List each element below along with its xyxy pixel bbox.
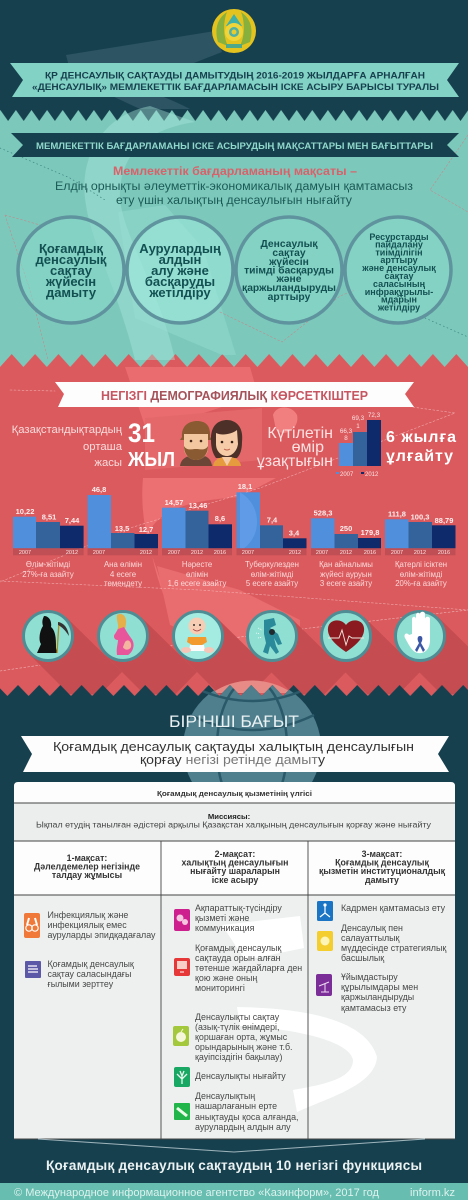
bar chart: tuberculosis mortality: 2007	[242, 550, 254, 556]
goal 3 item 2	[341, 923, 446, 963]
goal 2 item 5	[195, 1091, 298, 1132]
public health model table	[14, 782, 455, 1139]
public health model table: Ықпал етудің танылған әдістері арқылы Қазақстан халқының денсаулығын қорғау және нығайту	[36, 820, 431, 830]
goal circle 2	[127, 217, 233, 323]
caption: өлімін	[186, 570, 208, 579]
background: dark lower section	[0, 696, 468, 1186]
title text: «ДЕНСАУЛЫҚ» МЕМЛЕКЕТТІК БАҒДАРЛАМАСЫН ІСКЕ АСЫРУ БАРЫСЫ ТУРАЛЫ	[32, 82, 439, 92]
public health model table: халықтың денсаулығын	[182, 858, 288, 868]
mission row	[14, 803, 455, 841]
bar chart: infant mortality: 2007	[168, 550, 180, 556]
life expectancy bar chart: 8	[344, 435, 348, 442]
goal circle 2: алдын	[159, 252, 201, 267]
caption: 5 есеге азайту	[246, 579, 298, 588]
average age text: жасы	[94, 457, 122, 469]
goal circle 4: саласының	[373, 279, 426, 289]
bar chart: cancer mortality: 88,79	[435, 516, 453, 525]
goal circle 4: тиімділігін	[375, 248, 423, 258]
goal 2 item 1	[195, 903, 282, 933]
background: dark header	[0, 0, 468, 121]
bottom heading: 10 functions: Қоғамдық денсаулық сақтаудың 10 негізгі функциясы	[46, 1158, 422, 1173]
public health model table: талдау жұмысы	[52, 870, 122, 880]
goal circle 2: жетілдіру	[148, 285, 211, 300]
callout: 6 years growth: ұлғайту	[386, 448, 453, 465]
goal 2 item 2: қою және оның	[195, 973, 257, 983]
average age text	[12, 418, 175, 471]
goal circle 3: қаржыландыруды	[242, 283, 336, 294]
goal circle 1: жүйесін	[45, 274, 96, 289]
bar chart: infant mortality	[162, 498, 232, 588]
icon: pregnant woman	[98, 612, 148, 660]
caption	[319, 560, 373, 588]
goal 2 item 3: (азық-түлік өнімдері,	[195, 1022, 279, 1032]
bar chart: maternal mortality	[88, 485, 158, 588]
goal 1 item 2: Қоғамдық денсаулық	[48, 959, 134, 969]
goal 2 item 5: аурулардың алдын алу	[195, 1122, 291, 1132]
caption: Туберкулезден	[245, 560, 299, 569]
bar chart: circulatory disease: 2016	[364, 550, 376, 556]
caption: 20%-ға азайту	[395, 579, 447, 588]
goal 2 item 3: Денсаулықты сақтау	[195, 1012, 280, 1022]
public health model table: 1-мақсат:	[67, 853, 107, 863]
footer credit: © Международное информационное агентство «Казинформ», 2017 год	[14, 1187, 380, 1199]
goal 1 item 1: инфекциялық емес	[48, 920, 127, 930]
bar chart: infant mortality: 14,57	[165, 498, 183, 507]
goal 3 icon: purple scales	[316, 974, 332, 996]
bar chart: overall mortality: 8,51	[42, 512, 56, 522]
caption: Қатерлі ісіктен	[395, 560, 447, 569]
caption: Қан айналымы	[319, 560, 373, 569]
goal circle 4: мдарын	[381, 294, 417, 304]
bar chart: circulatory disease: 179,8	[361, 528, 379, 537]
globe cap over red section	[212, 680, 292, 693]
zigzag edge: red to dark	[0, 685, 468, 696]
bar chart: cancer mortality: 2012	[414, 550, 426, 556]
section title: first direction: БІРІНШІ БАҒЫТ	[169, 712, 299, 731]
goal 2 item 1: коммуникация	[195, 923, 255, 933]
public health model table: нығайту шараларын	[190, 866, 280, 876]
bar chart: infant mortality: 2012	[191, 550, 203, 556]
goal 2 item 1: Ақпараттық-түсіндіру	[195, 903, 282, 913]
goal 2 icon: green sprout	[174, 1067, 190, 1087]
icon: baby	[174, 612, 222, 660]
goal 3 icon: blue people	[317, 901, 333, 921]
caption: өлім-жітімді	[400, 570, 443, 579]
goal circle 4: жетілдіру	[377, 302, 420, 312]
caption	[104, 560, 142, 588]
public health model table: Қоғамдық денсаулық	[335, 858, 429, 868]
long shadows behind icon circles	[30, 617, 468, 694]
life expectancy bar chart: 72,3	[368, 412, 381, 419]
goal 2 item 2: Қоғамдық денсаулық	[195, 943, 281, 953]
bar chart: cancer mortality	[385, 510, 456, 588]
average age text: ЖЫЛ	[127, 449, 175, 471]
goal circle 3: және	[276, 274, 302, 285]
caption	[245, 560, 299, 588]
public health model table: 3-мақсат:	[362, 849, 402, 859]
icon: grim reaper	[24, 612, 72, 660]
bar chart: circulatory disease: 2007	[316, 550, 328, 556]
goal 2 item 2: сақтауда орын алған	[195, 953, 281, 963]
caption: Нәресте	[182, 560, 212, 569]
bar chart: cancer mortality: 100,3	[411, 512, 429, 522]
goal 2 icon: red monitor	[174, 958, 190, 976]
bar chart: maternal mortality: 13,5	[115, 524, 129, 533]
footer site: inform.kz	[410, 1187, 455, 1199]
caption: Ана өлімін	[104, 560, 142, 569]
icon: tuberculosis patient	[248, 612, 296, 660]
goal 3 item 1: Кадрмен қамтамасыз ету	[341, 903, 446, 913]
goal circle 4: пайдалану	[375, 240, 423, 250]
caption: 1,6 есеге азайту	[168, 579, 227, 588]
caption: 3 есеге азайту	[320, 579, 372, 588]
public health model table: Қоғамдық денсаулық қызметінің үлгісі	[157, 789, 312, 798]
life expectancy bar chart: 69,3	[352, 415, 365, 422]
goal circle 3: арттыру	[268, 292, 311, 303]
watermark logo	[66, 31, 300, 668]
goal 3 item 2: басшылық	[341, 953, 384, 963]
goal 1 item 2: сақтау саласындағы	[48, 969, 131, 979]
chart legend: 2007	[340, 472, 354, 478]
callout: 6 years growth: 6 жылға	[386, 429, 456, 446]
goal 3 icon: yellow phone	[317, 931, 333, 951]
goal 2 item 2: төтенше жағдайларға ден	[195, 963, 302, 973]
average age text: Қазақстандықтардың	[12, 424, 123, 436]
goal 1 item 2	[48, 959, 134, 989]
goals body	[14, 895, 455, 1139]
bar chart: circulatory disease: 528,3	[314, 508, 332, 518]
bar chart: circulatory disease	[311, 508, 381, 588]
zigzag edge: header to teal	[0, 110, 468, 121]
background: red section	[0, 367, 468, 697]
goal 1 icon: orange binoculars	[24, 913, 40, 938]
goal 3 item 3: қамтамасыз ету	[341, 1003, 407, 1013]
state emblem	[212, 9, 256, 53]
aim line 1: Елдің орнықты әлеуметтік-экономикалық дамуын қамтамасыз	[55, 181, 413, 193]
life expectancy label: Күтілетін	[267, 425, 333, 442]
ribbon line 1: Қоғамдық денсаулық сақтауды халықтың денсаулығын	[53, 740, 414, 754]
section ribbon: goals	[11, 133, 459, 157]
goal 2 item 5: Денсаулықтың	[195, 1091, 255, 1101]
life expectancy label: өмір	[292, 439, 324, 456]
caption: Өлім-жітімді	[26, 560, 70, 569]
goal circle 1: сақтау	[50, 263, 93, 278]
bar chart: tuberculosis mortality: 2012	[289, 550, 301, 556]
bar chart: overall mortality: 2012	[66, 550, 78, 556]
direction ribbon	[21, 736, 449, 772]
goal 3 item 3: қаржыландыруды	[341, 992, 414, 1002]
goal circle 1	[18, 217, 124, 323]
bar chart: maternal mortality: 46,8	[92, 485, 106, 494]
goal 2 item 3: орындарының және т.б.	[195, 1042, 292, 1052]
background: teal section	[0, 110, 468, 367]
bar chart: overall mortality: 7,44	[65, 516, 80, 525]
goal circle 3	[236, 217, 342, 323]
goal circle 4: сақтау	[384, 271, 414, 281]
title text: ҚР ДЕНСАУЛЫҚ САҚТАУДЫ ДАМЫТУДЫҢ 2016-2019 ЖЫЛДАРҒА АРНАЛҒАН	[45, 70, 425, 80]
bar chart: overall mortality: 10,22	[16, 507, 34, 516]
goal 2 icon: green apple	[173, 1026, 189, 1046]
goal 2 item 5: анықтауды қоса алғанда,	[195, 1112, 298, 1122]
caption: 27%-ға азайту	[22, 570, 74, 579]
goal circle 1: денсаулық	[36, 252, 107, 267]
icon: hand with ribbon	[396, 612, 444, 660]
life expectancy label: ұзақтығын	[257, 453, 333, 470]
goal 2 item 5: нашарлағанын ерте	[195, 1101, 277, 1111]
bar chart: circulatory disease: 2012	[340, 550, 352, 556]
life expectancy bar chart: 1	[356, 423, 360, 430]
bar chart: tuberculosis mortality: 18,1	[238, 482, 252, 491]
bar chart: infant mortality: 8,6	[215, 514, 225, 523]
goal 1 item 1: Инфекциялық және	[48, 910, 128, 920]
goal 2 item 3	[195, 1012, 292, 1062]
goal circle 1: Қоғамдық	[39, 241, 103, 256]
public health model table: Миссиясы:	[208, 812, 250, 821]
bar chart: maternal mortality: 12,7	[139, 525, 153, 534]
public health model table: Дәлелдемелер негізінде	[34, 862, 140, 872]
bar chart: cancer mortality: 111,8	[388, 510, 406, 518]
life expectancy bar chart	[336, 412, 381, 478]
goal circle 2: басқаруды	[145, 274, 215, 289]
title ribbon	[10, 63, 459, 97]
goal circle 4: Ресурстарды	[369, 232, 429, 242]
goal 2 item 3: қоршаған орта, жұмыс	[195, 1032, 288, 1042]
goal circle 1: дамыту	[46, 285, 97, 300]
goal 3 item 3: құрылымдары мен	[341, 982, 418, 992]
caption: өлім-жітімді	[251, 570, 294, 579]
goal 2 item 2	[195, 943, 302, 993]
bar chart: cancer mortality: 2007	[391, 550, 403, 556]
goal circle 3: сақтау	[272, 248, 306, 259]
bracket arrow under table	[38, 1139, 425, 1152]
goal circle 4: арттыру	[380, 255, 418, 265]
goal circle 4: инфрақұрылы-	[365, 287, 433, 297]
icon: heart with pulse	[322, 612, 370, 660]
caption: 4 есеге	[110, 570, 136, 579]
caption	[168, 560, 227, 588]
bar chart: infant mortality: 2016	[214, 550, 226, 556]
goal circle 3: тиімді басқаруды	[244, 264, 334, 276]
life expectancy label	[257, 425, 333, 470]
bar chart: infant mortality: 13,46	[189, 501, 207, 510]
goal 2 item 3: қауіпсіздігін бақылау)	[195, 1052, 282, 1062]
caption: жүйесі ауруын	[320, 570, 372, 579]
globe logo	[184, 685, 320, 782]
public health model table: 2-мақсат:	[215, 849, 255, 859]
goal 1 item 2: ғылыми зерттеу	[48, 979, 114, 989]
aim line 2: ету үшін халықтың денсаулығын нығайту	[116, 195, 352, 207]
goals header row	[14, 841, 455, 895]
bar chart: circulatory disease: 250	[340, 524, 352, 533]
bar chart: tuberculosis mortality: 3,4	[289, 528, 300, 538]
goal 3 item 2: салауаттылық	[341, 933, 400, 943]
bar chart: overall mortality	[13, 507, 84, 579]
public health model table: қызметін институционалдық	[319, 866, 446, 876]
aim heading: Мемлекеттік бағдарламаның мақсаты –	[113, 166, 358, 178]
demographic heading text: НЕГІЗГІ ДЕМОГРАФИЯЛЫҚ КӨРСЕТКІШТЕР	[101, 389, 368, 403]
bar chart: maternal mortality: 2012	[140, 550, 152, 556]
goal 3 item 3	[341, 972, 418, 1013]
bar chart: tuberculosis mortality: 7,4	[267, 516, 278, 524]
goal 2 icon: green bandage	[174, 1103, 190, 1120]
table title row	[14, 782, 455, 803]
goal 2 item 2: мониторингі	[195, 983, 245, 993]
goal 1 item 1: ауруларды эпидқадағалау	[48, 930, 156, 940]
dotted decorative lines	[0, 135, 468, 671]
ribbon line 2: қорғау негізі ретінде дамыт у	[140, 753, 326, 767]
goal circle 4	[345, 217, 451, 323]
goal 2 item 4: Денсаулықты нығайту	[195, 1071, 286, 1081]
goal 1 item 1	[48, 910, 156, 940]
white watermark swoosh	[222, 916, 377, 1112]
caption: төмендету	[104, 579, 142, 588]
bar chart: overall mortality: 2007	[19, 550, 31, 556]
goal 3 item 2: Денсаулық пен	[341, 923, 403, 933]
goal circle 2: Аурулардың	[139, 241, 221, 256]
value: 31 years: 31	[128, 418, 155, 448]
bar chart: tuberculosis mortality	[236, 482, 306, 588]
public health model table: іске асыру	[212, 875, 258, 885]
demographic heading ribbon	[55, 382, 414, 407]
goal circle 3: жүйесін	[268, 257, 309, 268]
goal 2 item 1: қызметі және	[195, 913, 249, 923]
goal 3 item 2: мүддесінде стратегиялық	[341, 943, 446, 953]
goal circle 3: Денсаулық	[260, 239, 318, 250]
goal 1 icon: purple books	[25, 961, 41, 978]
bar chart: maternal mortality: 2007	[93, 550, 105, 556]
goal circle 4: және денсаулық	[361, 263, 436, 273]
public health model table: дамыту	[365, 875, 399, 885]
caption	[395, 560, 447, 588]
callout: 6 years growth	[386, 429, 456, 465]
average age text: орташа	[83, 441, 123, 453]
icon: man and woman faces	[180, 420, 242, 466]
life expectancy bar chart: 66,3	[340, 428, 353, 435]
goal circle 2: алу және	[151, 263, 209, 278]
goal 3 item 3: Ұйымдастыру	[341, 972, 398, 982]
chart legend: 2012	[365, 472, 379, 478]
caption	[22, 560, 74, 579]
bar chart: cancer mortality: 2016	[438, 550, 450, 556]
programme aim text	[55, 166, 413, 207]
chart legend	[336, 472, 379, 478]
section ribbon text: МЕМЛЕКЕТТІК БАҒДАРЛАМАНЫ ІСКЕ АСЫРУДЫҢ МАҚСАТТАРЫ МЕН БАҒЫТТАРЫ	[36, 141, 433, 151]
goal 2 icon: magenta chat	[174, 909, 190, 931]
footer bar	[0, 1183, 468, 1200]
title text	[32, 70, 439, 92]
zigzag edge: teal to red	[0, 354, 468, 367]
